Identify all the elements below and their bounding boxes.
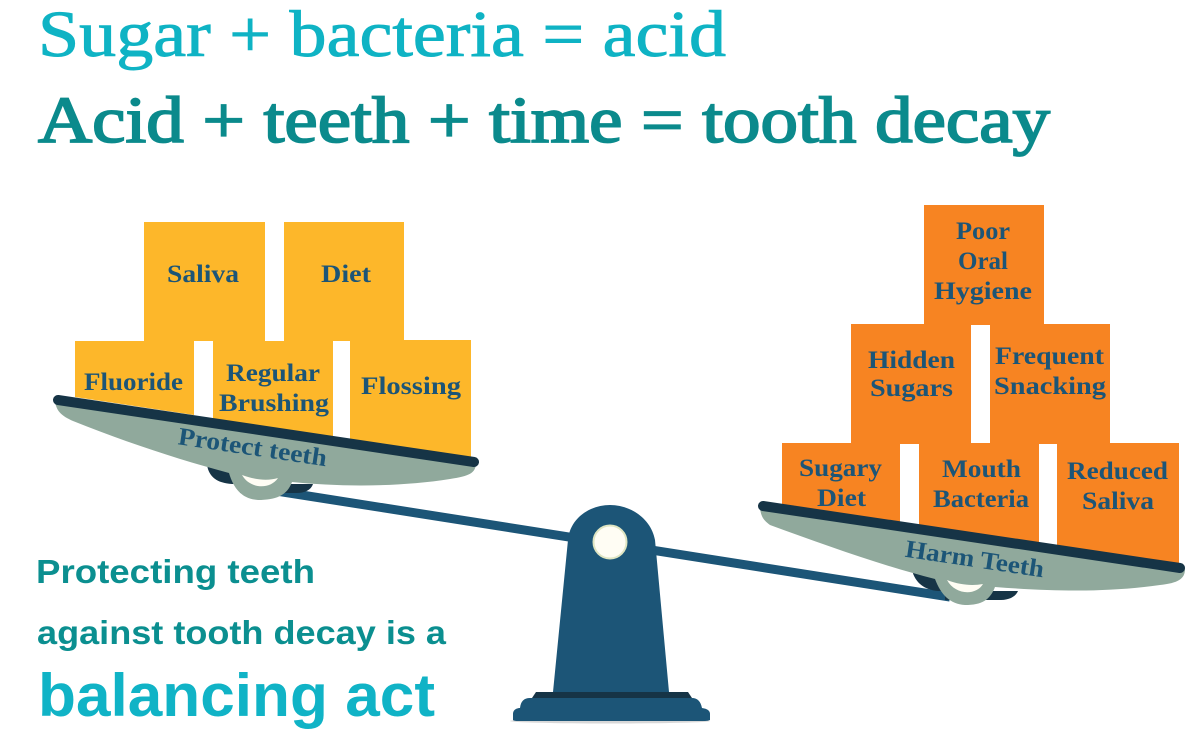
left pan bar [58, 400, 474, 462]
fulcrum stand [510, 505, 710, 724]
block: Regular Brushing: Regular [226, 360, 320, 387]
block: Diet [284, 222, 404, 341]
caption [36, 553, 447, 729]
right pan: harm teeth [760, 205, 1185, 605]
block: Fluoride [75, 341, 194, 415]
block: Hidden Sugars: Hidden [868, 347, 955, 374]
block: Poor Oral Hygiene: Oral [958, 248, 1008, 275]
stand base top [532, 692, 692, 698]
block: Flossing: Flossing [361, 373, 462, 400]
right hanger opening [947, 580, 983, 592]
block: Regular Brushing [213, 341, 333, 441]
right pan bar [763, 506, 1180, 568]
block: Reduced Saliva: Reduced [1067, 458, 1168, 485]
block: Fluoride: Fluoride [84, 369, 183, 396]
left pan label: Protect teeth [176, 423, 329, 472]
right pan bowl [760, 508, 1185, 605]
block: Hidden Sugars: Sugars [870, 375, 953, 402]
block: Mouth Bacteria [919, 443, 1039, 547]
left pan: protect teeth [55, 222, 476, 500]
block: Flossing [350, 340, 471, 461]
block: Hidden Sugars [851, 324, 971, 444]
block: Reduced Saliva [1057, 443, 1179, 567]
block: Poor Oral Hygiene: Hygiene [934, 278, 1032, 305]
block: Sugary Diet: Diet [817, 485, 867, 512]
left hanger opening [242, 475, 278, 486]
title line 2: Acid + teeth + time = tooth decay [38, 84, 1050, 157]
title line 1: Sugar + bacteria = acid [38, 0, 726, 71]
block: Mouth Bacteria: Bacteria [933, 486, 1030, 513]
block: Mouth Bacteria: Mouth [942, 456, 1021, 483]
right hanger [912, 570, 1018, 600]
block: Frequent Snacking: Frequent [995, 343, 1105, 370]
block: Frequent Snacking: Snacking [994, 373, 1107, 400]
block: Saliva: Saliva [167, 261, 240, 288]
left pan bowl [55, 402, 476, 500]
block: Reduced Saliva: Saliva [1082, 488, 1155, 515]
caption line 1: Protecting teeth [36, 553, 315, 590]
block: Diet: Diet [321, 261, 372, 288]
caption highlight: balancing act [38, 662, 435, 729]
block: Sugary Diet: Sugary [799, 455, 883, 482]
block: Frequent Snacking [990, 324, 1110, 444]
block: Regular Brushing: Brushing [219, 390, 330, 417]
stand shadow [510, 718, 710, 724]
left hanger [207, 465, 313, 493]
right pan label: Harm Teeth [903, 536, 1046, 583]
caption line 2: against tooth decay is a [37, 614, 447, 651]
scale beam [270, 490, 950, 597]
block: Poor Oral Hygiene [924, 205, 1044, 325]
stand body [553, 505, 669, 692]
block: Saliva [144, 222, 265, 341]
block: Poor Oral Hygiene: Poor [956, 218, 1010, 245]
pivot [594, 526, 626, 558]
stand base [513, 698, 710, 721]
block: Sugary Diet [782, 443, 900, 522]
